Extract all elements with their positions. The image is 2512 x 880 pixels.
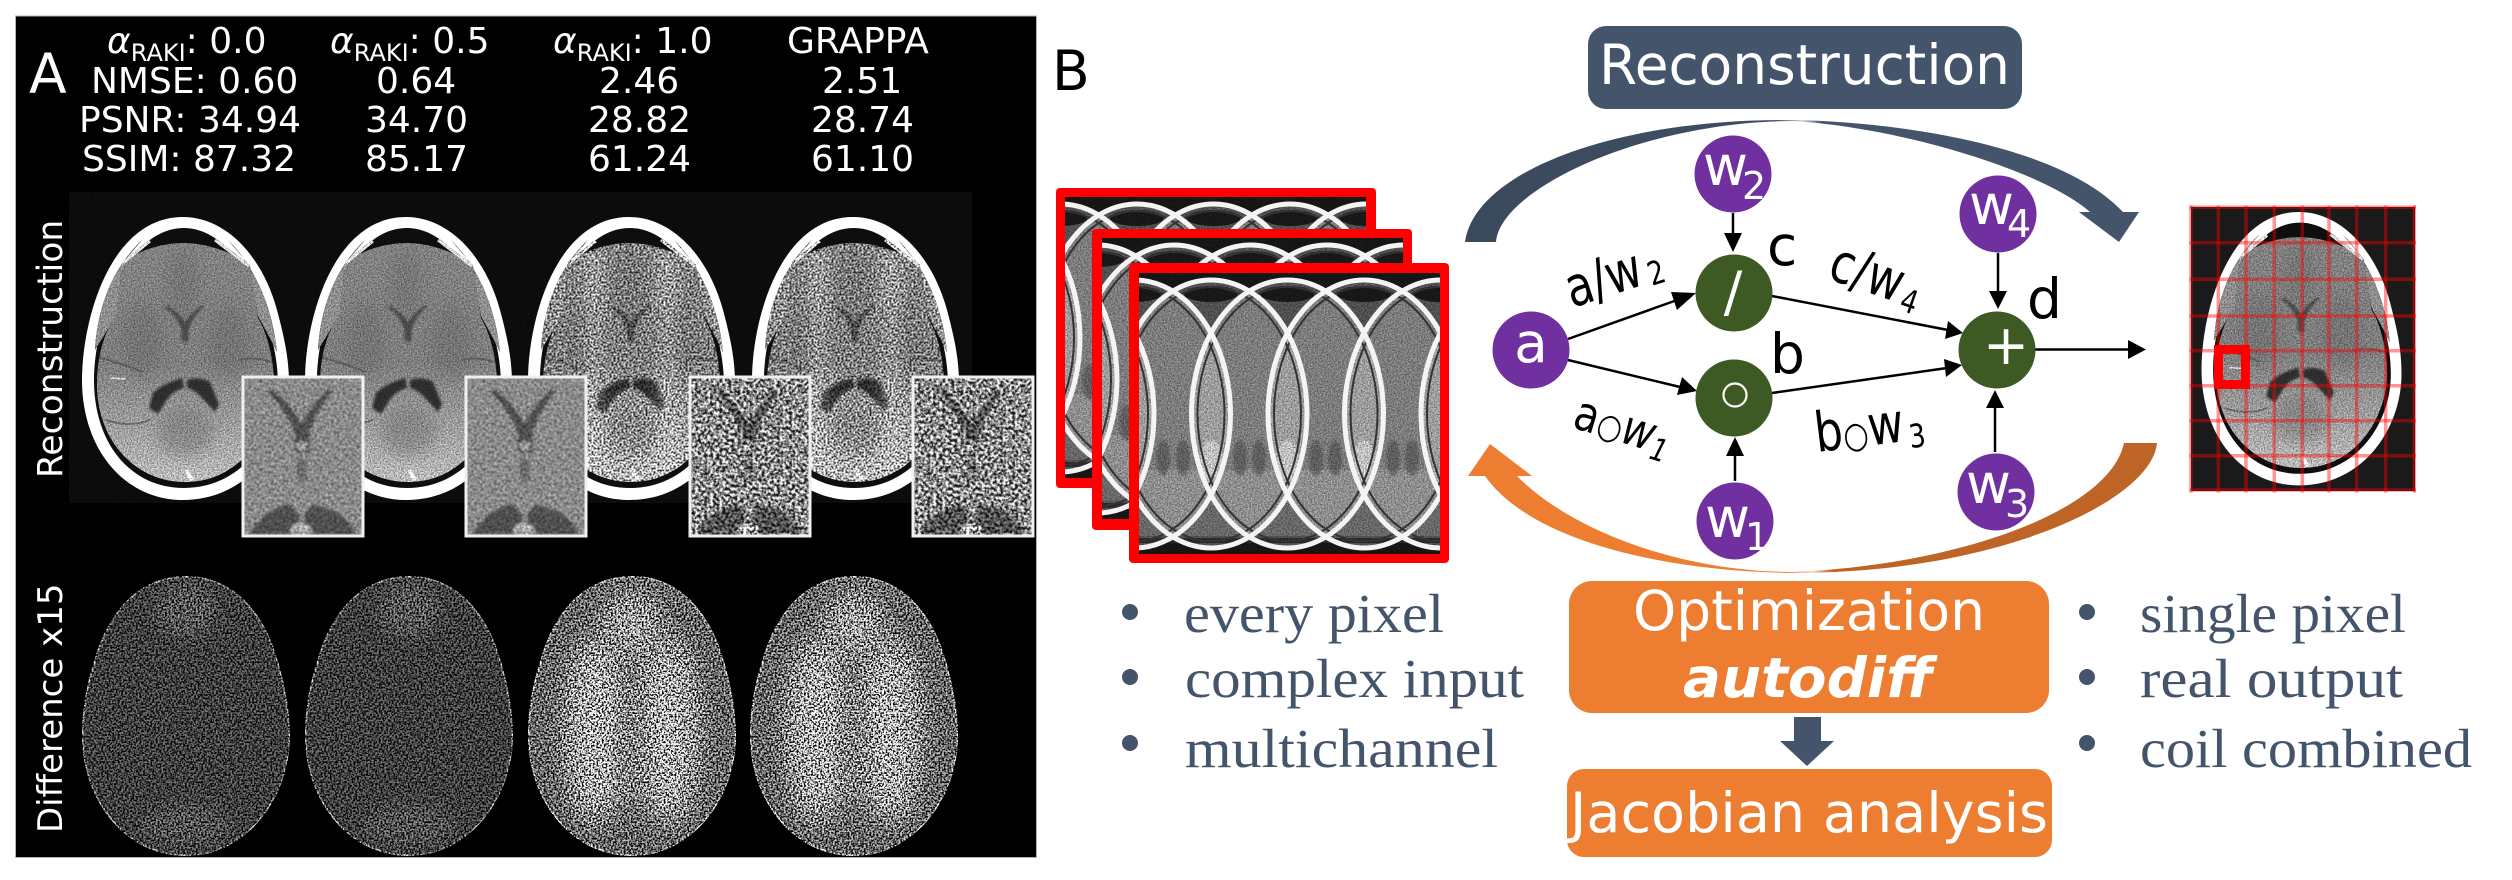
difference map 3 [526,570,738,860]
column 1 metrics [79,21,301,180]
brain reconstruction 4 [752,217,959,500]
edge w4 to d [1989,253,2007,309]
edge c to d [1772,296,1963,339]
optimization box: Optimization [1633,579,1985,643]
bullet: complex input: complex input [1185,648,1524,709]
column 1 metrics: : 0.0 [186,21,266,62]
node a [1492,311,1570,388]
heading: Reconstruction: Reconstruction [1599,33,2010,97]
difference map 1 [80,570,292,860]
column 2 metrics: 0.64 [376,61,456,102]
edge d to output [2035,340,2146,359]
column 1 metrics: NMSE: 0.60 [91,61,298,102]
edge label a o w1: a○w [1568,385,1663,463]
operator node b: multiply [1696,360,1772,436]
column 2 metrics: α [330,21,354,62]
column 1 metrics: SSIM: 87.32 [82,139,296,180]
metrics table [79,21,929,180]
column 3 metrics: 28.82 [588,100,691,141]
column 1 metrics: α [107,21,131,62]
column 3 metrics: 2.46 [599,61,679,102]
operator node d: add: + [1983,313,2029,377]
arrow: reconstruction arc [1465,120,2139,242]
row label: Reconstruction: Reconstruction [31,220,71,478]
edge w1 to b [1726,437,1744,481]
node w2 [1694,134,1772,212]
Jacobian analysis box: Jacobian analysis [1567,781,2048,845]
node label d: d [2027,267,2062,331]
reconstruction image strip backdrop [69,192,972,503]
column 3 metrics: RAKI [577,39,632,67]
difference map 2 [303,570,515,860]
aliased image front [961,263,1614,563]
optimization box: autodiff [1683,646,1938,710]
selected pixel box [2218,350,2246,384]
operator node c: divide [1696,254,1772,332]
node label b: b [1770,322,1805,386]
node w3 [1958,452,2034,530]
panel letter B: B [1052,39,1090,103]
difference map 4 [748,570,960,860]
panel A black background [16,16,1036,858]
aliased image middle [924,229,1577,530]
bullet: every pixel: every pixel [1184,583,1444,644]
zoom inset 1 [243,377,363,537]
output image dark background [2191,207,2415,491]
panel A: image quality comparison [16,16,1036,860]
brain reconstruction 2 [305,217,512,500]
output image with patch grid [2190,206,2416,492]
operator node d: add [1958,312,2036,388]
column 1 metrics: RAKI [131,39,186,67]
bullet: real output: real output [2140,648,2403,709]
node w1 [1696,482,1774,560]
column 4 metrics [787,21,929,180]
edge label b o w3: 3 [1907,416,1928,456]
edge label c/w4: c/w [1822,230,1913,315]
arrow: optimization to Jacobian [1780,717,1834,766]
column 3 metrics [553,21,712,180]
column 3 metrics: : 1.0 [632,21,712,62]
node w3: 3 [2005,482,2029,526]
arrow: optimization arc [1468,443,2157,573]
column 4 metrics: 28.74 [811,100,914,141]
aliased image back [887,188,1540,488]
panel letter A: A [29,42,67,106]
edge label b o w3: b○w [1811,391,1907,465]
bullet: single pixel: single pixel [2140,583,2406,644]
node w4: 4 [2007,202,2031,246]
operator node c: divide: / [1724,260,1743,324]
column 3 metrics: α [553,21,577,62]
edge label a o w1: 1 [1646,430,1672,470]
output brain [2202,212,2401,485]
node w2: w [1703,134,1748,198]
column 2 metrics: 34.70 [365,100,468,141]
edge label c/w4: 4 [1895,281,1923,322]
network edges [1568,213,2146,481]
node w1: 1 [1745,515,1769,559]
edge label a/w2: 2 [1643,253,1670,293]
brain reconstruction 3 [528,217,735,500]
patch grid [2190,206,2416,492]
node label c: c [1767,214,1797,278]
bullet: coil combined: coil combined [2140,718,2472,779]
column 4 metrics: 2.51 [822,61,902,102]
edge w2 to c [1724,213,1742,252]
left bullet list [1122,583,1524,779]
input images stack [887,188,1614,563]
edge b to d [1772,359,1962,393]
optimization box [1569,579,2049,713]
panel B: autodiff pipeline [1056,26,2472,857]
zoom inset 2 [466,377,586,537]
column 4 metrics: 61.10 [811,139,914,180]
column 2 metrics: RAKI [354,39,409,67]
column 3 metrics: 61.24 [588,139,691,180]
zoom inset 3 [690,377,810,537]
node a: a [1514,311,1548,375]
edge w3 to d [1986,390,2004,452]
node w2: 2 [1742,164,1766,208]
node w4: w [1969,173,2014,237]
edge label a/w2: a/w [1556,236,1650,321]
column 2 metrics: 85.17 [365,139,468,180]
bullet: multichannel: multichannel [1185,718,1498,779]
column 2 metrics: : 0.5 [409,21,490,62]
right bullet list [2079,583,2472,779]
brain reconstruction 1 [82,217,289,500]
zoom inset 4 [913,377,1033,537]
edge a to c [1568,292,1696,339]
node w4 [1960,173,2036,252]
node w1: w [1705,486,1750,550]
column 1 metrics: PSNR: 34.94 [79,100,301,141]
node w3: w [1966,452,2011,516]
row label: Difference x15: Difference x15 [31,584,71,833]
edge a to b [1568,360,1697,395]
column 2 metrics [330,21,490,180]
column 4 metrics: GRAPPA [787,21,929,62]
